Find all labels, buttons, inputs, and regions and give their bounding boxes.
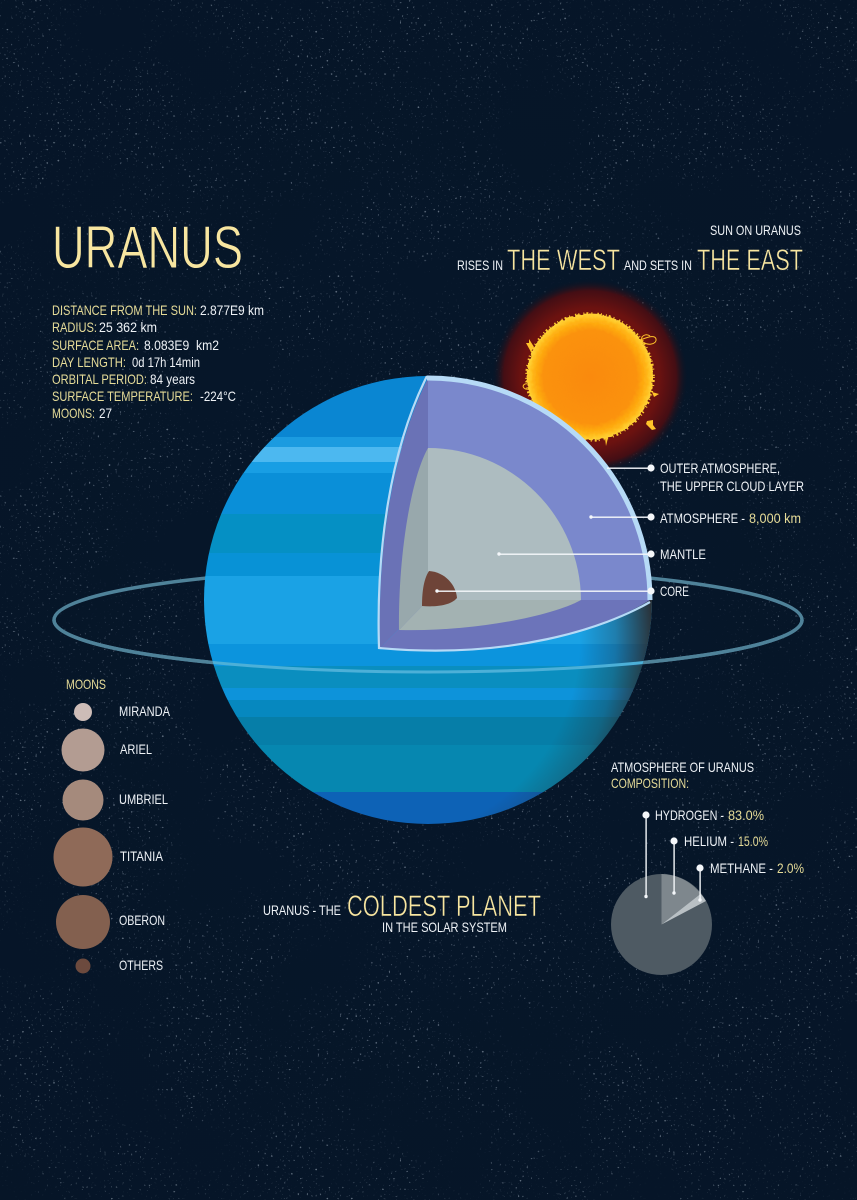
atmosphere composition heading: ATMOSPHERE OF URANUS xyxy=(611,759,754,775)
planet Uranus xyxy=(204,376,652,824)
moons legend: MOONS xyxy=(66,676,106,692)
moon: Umbriel xyxy=(62,780,168,820)
layer labels: ATMOSPHERE - xyxy=(660,510,745,526)
heading: sun on Uranus: SUN ON URANUS xyxy=(710,222,801,238)
mantle layer faces xyxy=(428,448,581,600)
sun glow xyxy=(492,279,688,475)
moon: Ariel xyxy=(62,728,152,772)
ring: front half outside planet xyxy=(54,620,802,662)
planet facts list: 8.083E9 km2 xyxy=(144,337,219,353)
moon: Oberon: OBERON xyxy=(119,912,165,928)
heading: sun on Uranus: AND SETS IN xyxy=(624,257,692,273)
atmosphere composition heading: COMPOSITION: xyxy=(611,775,689,791)
title: URANUS xyxy=(52,214,243,281)
planet facts list: 27 xyxy=(99,405,112,421)
heading: sun on Uranus: THE EAST xyxy=(697,244,803,277)
layer labels: MANTLE xyxy=(660,546,706,562)
solar flare spiral xyxy=(640,335,656,344)
composition labels and leaders: 83.0% xyxy=(728,807,764,823)
planet facts list: SURFACE TEMPERATURE: xyxy=(52,388,193,404)
caption: coldest planet: COLDEST PLANET xyxy=(347,890,541,923)
planet facts list: DISTANCE FROM THE SUN: xyxy=(52,302,197,318)
sun xyxy=(492,279,688,475)
layer labels: THE UPPER CLOUD LAYER xyxy=(660,478,804,494)
moon: Titania: TITANIA xyxy=(120,848,164,864)
layer labels: CORE xyxy=(660,583,689,599)
leader lines and dots for layers xyxy=(435,464,655,595)
planet facts list: 84 years xyxy=(150,371,195,387)
solar prominences xyxy=(526,339,659,446)
moon: Miranda xyxy=(74,703,171,721)
sun disc xyxy=(527,314,653,440)
planet terminator shadow xyxy=(491,600,652,814)
moon: Others: OTHERS xyxy=(119,957,163,973)
moon: Oberon xyxy=(56,895,165,949)
ring: front half over planet xyxy=(212,661,644,674)
composition labels and leaders: METHANE - xyxy=(710,860,773,876)
composition labels and leaders: HELIUM - xyxy=(684,833,734,849)
moon: Others xyxy=(76,957,163,974)
planet facts list: DAY LENGTH: xyxy=(52,354,126,370)
layer labels: OUTER ATMOSPHERE, xyxy=(660,460,780,476)
composition labels and leaders: 15.0% xyxy=(738,833,768,849)
planet facts list: MOONS: xyxy=(52,405,95,421)
moon: Ariel: ARIEL xyxy=(120,741,152,757)
planet facts list: ORBITAL PERIOD: xyxy=(52,371,147,387)
caption: coldest planet: URANUS - THE xyxy=(263,902,341,918)
atmosphere layer faces xyxy=(428,380,650,600)
sun corona spikes xyxy=(526,314,654,440)
pie chart: atmosphere composition xyxy=(611,874,712,975)
planet facts list: 2.877E9 km xyxy=(200,302,264,318)
moons legend xyxy=(54,676,171,974)
planet facts list: 25 362 km xyxy=(99,319,157,335)
planet facts list: -224°C xyxy=(200,388,236,404)
moon: Umbriel: UMBRIEL xyxy=(119,791,168,807)
caption: coldest planet xyxy=(263,890,541,935)
core xyxy=(422,571,457,606)
atmosphere composition heading xyxy=(611,759,754,791)
heading: sun on Uranus: RISES IN xyxy=(457,257,503,273)
moon: Miranda: MIRANDA xyxy=(119,703,171,719)
ring: back half xyxy=(54,568,802,672)
planet facts list xyxy=(52,302,264,421)
caption: coldest planet: IN THE SOLAR SYSTEM xyxy=(382,919,507,935)
cutaway wedge of planet interior xyxy=(379,376,650,651)
composition labels and leaders xyxy=(642,807,804,902)
planet facts list: 0d 17h 14min xyxy=(132,354,200,370)
outer atmosphere rim xyxy=(427,378,650,600)
heading: sun on Uranus: THE WEST xyxy=(507,244,620,277)
composition labels and leaders: HYDROGEN - xyxy=(655,807,724,823)
layer labels xyxy=(660,460,804,599)
planet facts list: RADIUS: xyxy=(52,319,97,335)
planet bands xyxy=(204,376,652,824)
composition labels and leaders: 2.0% xyxy=(777,860,804,876)
heading: sun on Uranus xyxy=(457,222,803,277)
layer labels: 8,000 km xyxy=(749,510,801,526)
planet facts list: SURFACE AREA: xyxy=(52,337,139,353)
moon: Titania xyxy=(54,828,164,886)
